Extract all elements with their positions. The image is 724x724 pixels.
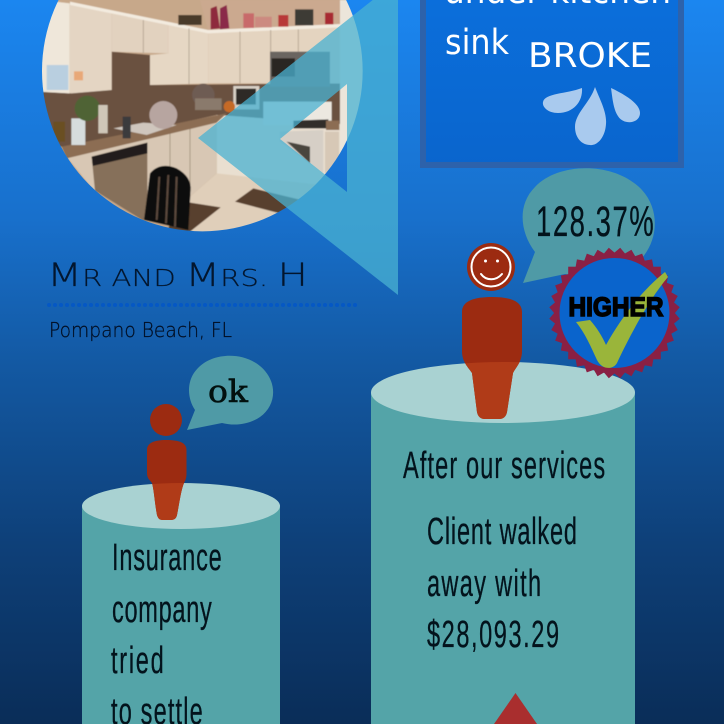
pillar top	[371, 362, 635, 423]
badge text: HIGHER	[568, 292, 664, 322]
right pillar	[371, 362, 635, 724]
kitchen photo circle	[40, 0, 367, 240]
bubble text: 128.37%	[536, 197, 654, 246]
translucent triangle overlay	[198, 0, 398, 295]
icon: smiley	[472, 248, 510, 286]
body	[147, 440, 186, 520]
badge: higher	[549, 248, 680, 378]
text: right pillar: Client walked	[427, 509, 577, 552]
person: large figure	[462, 243, 522, 419]
text: left pillar: tried	[111, 638, 164, 681]
text: right pillar: away with	[427, 561, 541, 604]
person: small figure	[147, 404, 186, 520]
icon: water drops	[543, 87, 640, 145]
head	[150, 404, 182, 436]
pillar body	[371, 392, 635, 724]
text: right pillar	[403, 443, 605, 655]
speech bubble: ok	[187, 356, 273, 430]
arrow: up triangle	[494, 693, 537, 724]
body lower	[465, 362, 520, 419]
body	[462, 297, 522, 419]
dotted divider	[49, 303, 358, 307]
text: right pillar: After our services	[403, 443, 605, 486]
left pillar	[82, 483, 280, 724]
badge disc	[560, 258, 670, 368]
head	[467, 243, 515, 291]
notice text: sink: sink	[445, 23, 510, 63]
text: left pillar: Insurance	[112, 535, 222, 578]
pillar body	[82, 506, 280, 724]
panel: broken pipe notice	[423, 0, 681, 165]
text: right pillar: $28,093.29	[427, 612, 559, 655]
body lower	[152, 483, 184, 520]
notice box	[423, 0, 681, 165]
text: left pillar: company	[112, 587, 212, 630]
badge burst	[549, 248, 680, 378]
icon: check mark	[576, 272, 668, 368]
location subtitle: Pompano Beach, FL	[49, 318, 232, 342]
text: left pillar	[111, 535, 222, 724]
pillar top	[82, 483, 280, 529]
title: M R AND M RS. H	[47, 256, 308, 294]
bubble text: ok	[208, 374, 248, 410]
speech bubble: percentage	[523, 168, 655, 283]
notice text: BROKE: BROKE	[528, 36, 652, 76]
